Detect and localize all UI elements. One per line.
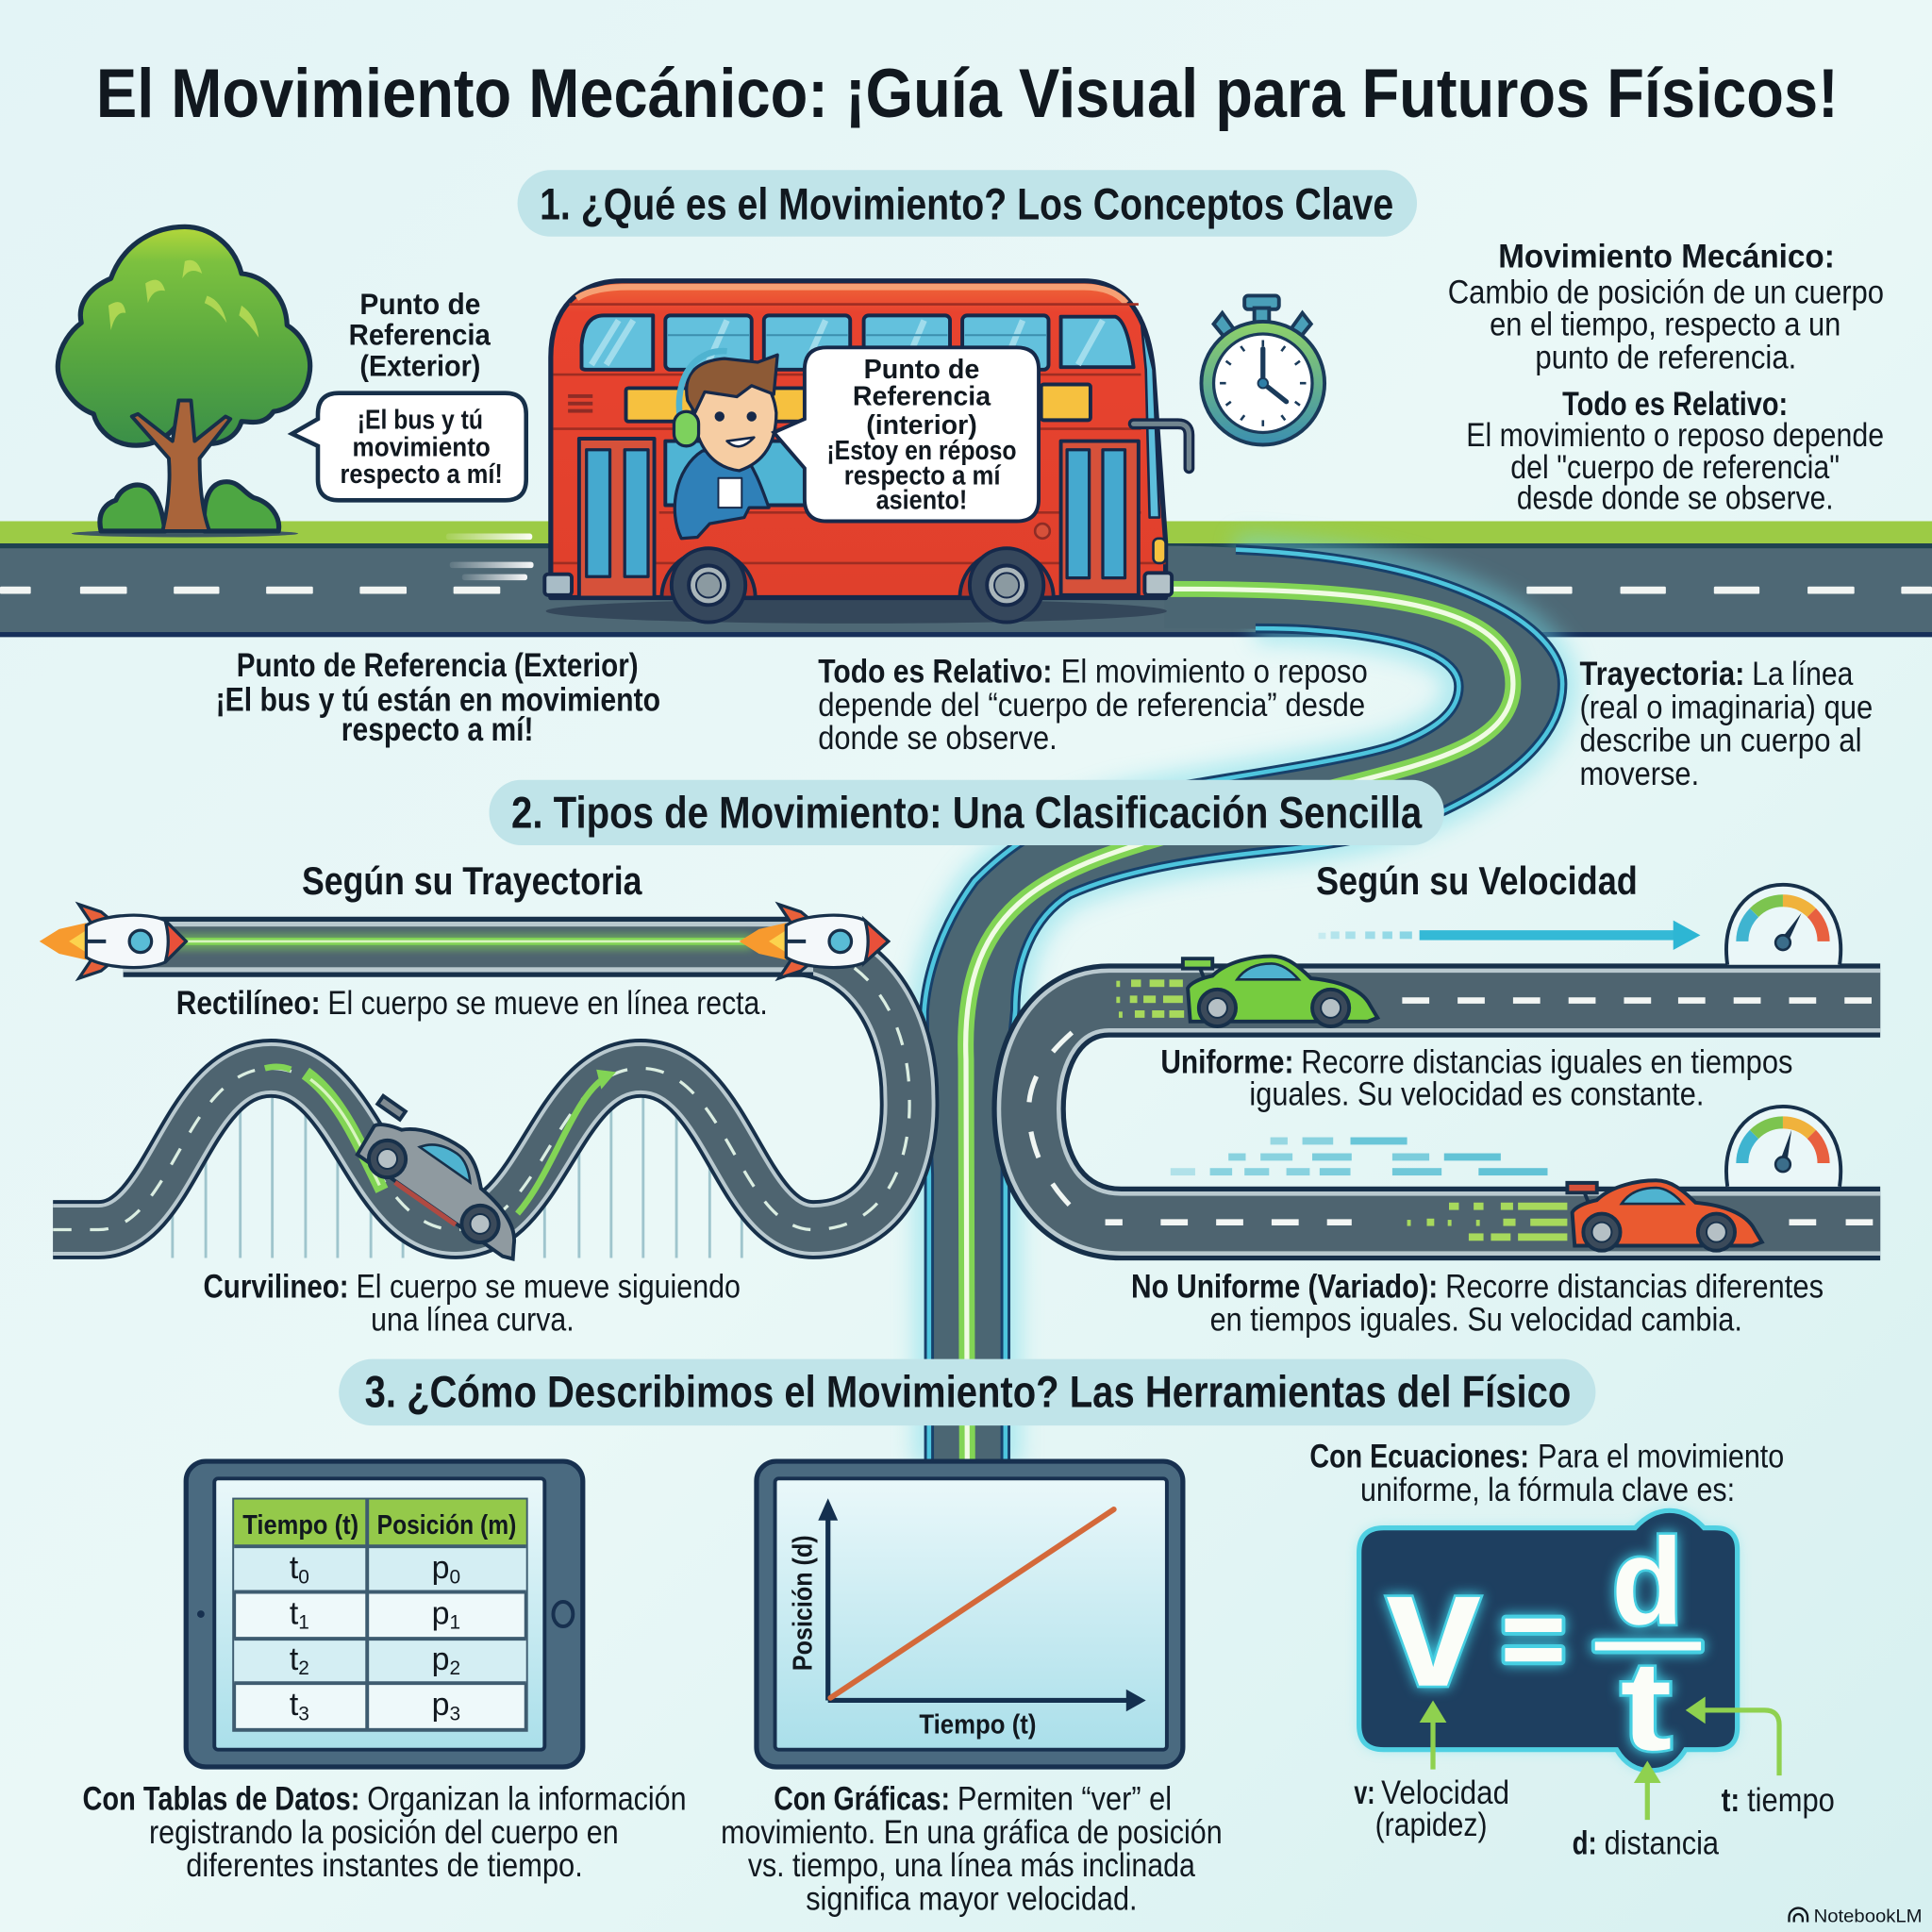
icon: green car (1116, 957, 1377, 1026)
text block: rectilinear: El cuerpo se mueve en línea recta. (327, 985, 768, 1022)
doors (579, 439, 1139, 597)
data table: t (290, 1641, 298, 1677)
text block: everything is relative: El movimiento o reposo (1061, 654, 1368, 691)
text block: equations: uniforme, la fórmula clave es: (1360, 1472, 1735, 1508)
icon: bushes (100, 482, 279, 531)
text block: curvilinear: una línea curva. (371, 1302, 575, 1339)
callout: interior speech bubble (774, 347, 1039, 521)
section 2 heading: 2. Tipos de Movimiento: Una Clasificación Sencilla (511, 788, 1423, 838)
text block: rectilinear (176, 985, 768, 1022)
section 1 heading: 1. ¿Qué es el Movimiento? Los Conceptos Clave (540, 178, 1393, 228)
text block: data tables: Organizan la información (367, 1781, 687, 1818)
speed streaks: variable motion (1171, 1138, 1567, 1241)
formula glyphs: d (1611, 1512, 1683, 1650)
text block: trajectory: describe un cuerpo al (1579, 723, 1862, 759)
icon: stopwatch (1201, 295, 1324, 445)
data table: t (290, 1550, 298, 1586)
text block: curvilinear: El cuerpo se mueve siguiendo (356, 1268, 741, 1305)
text block: equations (1309, 1439, 1784, 1508)
bus (544, 281, 1189, 624)
panel: tablet with position-time graph (757, 1461, 1183, 1767)
panel: tablet with position-time graph: Posición (d) (789, 1535, 819, 1671)
text block: mechanical movement definition: Movimiento Mecánico: (1498, 238, 1835, 275)
data table: Tiempo (t) (242, 1510, 358, 1541)
mirror (1134, 424, 1189, 468)
arrows: formula callouts (1420, 1697, 1779, 1820)
text block: exterior reference point: ¡El bus y tú están en movimiento (216, 682, 660, 719)
text block: graphs: Permiten “ver” el (958, 1781, 1172, 1818)
text block: everything is relative: Todo es Relativo: (818, 654, 1052, 691)
text block: trajectory (1579, 656, 1873, 792)
text block: everything is relative: donde se observe. (818, 720, 1058, 757)
text block: mechanical movement definition: Cambio de posición de un cuerpo (1448, 274, 1884, 310)
section 1 heading (518, 170, 1417, 237)
data table: p (432, 1641, 449, 1677)
callout: interior speech bubble: ¡Estoy en réposo (826, 436, 1017, 466)
icon: gray car on curve (344, 1094, 548, 1266)
callout: exterior speech bubble (292, 393, 526, 500)
callout: interior speech bubble: asiento! (876, 485, 967, 515)
text block: mechanical movement definition (1448, 238, 1884, 516)
text block: non uniform (1131, 1268, 1824, 1339)
text block: trajectory: moverse. (1579, 756, 1699, 792)
text block: everything is relative (818, 654, 1368, 757)
subheading: by speed: Según su Velocidad (1316, 858, 1638, 903)
icon: red car (1567, 1180, 1762, 1251)
text block: mechanical movement definition: Todo es Relativo: (1562, 386, 1788, 423)
callout: interior speech bubble: Punto de (864, 355, 979, 385)
data table: p (432, 1595, 449, 1631)
text block: data tables: registrando la posición del cuerpo en (149, 1814, 619, 1851)
bumpers and lights (544, 575, 572, 595)
text block: trajectory: La línea (1752, 656, 1854, 692)
panel: tablet with position-time graph: Tiempo (t) (919, 1710, 1036, 1740)
data table: 3 (298, 1703, 309, 1724)
data table: t (290, 1595, 298, 1631)
text block: uniform: iguales. Su velocidad es constante. (1249, 1076, 1704, 1113)
text block: graphs: vs. tiempo, una línea más inclinada (748, 1847, 1195, 1884)
text block: trajectory: Trayectoria: (1579, 656, 1744, 692)
icon: tree (58, 226, 310, 537)
icon: left rocket (40, 905, 186, 978)
formula labels: Velocidad (1381, 1774, 1509, 1811)
text block: exterior reference point (216, 647, 660, 748)
text block: non uniform: en tiempos iguales. Su velocidad cambia. (1210, 1302, 1742, 1339)
chart: support pillars under curved road (173, 1068, 741, 1258)
data table: 0 (298, 1566, 309, 1588)
watermark: NotebookLM (1814, 1907, 1923, 1927)
text block: curvilinear (204, 1268, 741, 1339)
formula labels: tiempo (1747, 1782, 1835, 1819)
text block: exterior reference point: Punto de Referencia (Exterior) (237, 647, 639, 684)
text block: non uniform: No Uniforme (Variado): (1131, 1268, 1438, 1305)
text block: uniform (1160, 1044, 1792, 1113)
text block: uniform: Uniforme: (1160, 1044, 1293, 1081)
text block: curvilinear: Curvilineo: (204, 1268, 349, 1305)
formula labels: d: (1573, 1825, 1597, 1862)
text block: graphs: significa mayor velocidad. (806, 1880, 1138, 1917)
data table: t (290, 1687, 298, 1723)
data table: 2 (449, 1657, 460, 1679)
formula glyphs: t (1621, 1635, 1672, 1777)
panel: tablet with data table (186, 1461, 583, 1767)
text block: mechanical movement definition: en el tiempo, respecto a un (1490, 306, 1840, 342)
text block: graphs: Con Gráficas: (774, 1781, 950, 1818)
section 3 heading (339, 1359, 1595, 1425)
callout: interior speech bubble: respecto a mí (844, 460, 1001, 491)
green motion arrows on the road (265, 1067, 291, 1070)
text block: rectilinear: Rectilíneo: (176, 985, 321, 1022)
section 3 heading: 3. ¿Cómo Describimos el Movimiento? Las Herramientas del Físico (365, 1367, 1571, 1417)
exterior reference label: (Exterior) (359, 349, 480, 382)
text block: mechanical movement definition: del "cuerpo de referencia" (1510, 449, 1840, 486)
formula labels: distancia (1605, 1825, 1719, 1862)
formula glyphs (1386, 1512, 1703, 1777)
formula labels (1354, 1774, 1835, 1862)
text block: data tables: diferentes instantes de tiempo. (186, 1847, 583, 1884)
arrow: constant speed (1319, 921, 1700, 950)
graph line (830, 1509, 1114, 1698)
trajectory road: the path of motion from bus to section 3 (924, 546, 1562, 1466)
rectilinear road with rockets (40, 905, 889, 978)
text block: equations: Para el movimiento (1538, 1439, 1784, 1475)
callout: exterior speech bubble: movimiento (353, 432, 491, 462)
callout: exterior speech bubble: ¡El bus y tú (358, 406, 483, 436)
data table: 3 (449, 1703, 460, 1724)
yellow panels (626, 385, 1091, 422)
text block: uniform: Recorre distancias iguales en tiempos (1301, 1044, 1792, 1081)
text block: data tables (83, 1781, 687, 1884)
icon: speedometer variable (1726, 1107, 1840, 1187)
upper windows (581, 315, 1134, 370)
text block: equations: Con Ecuaciones: (1309, 1439, 1529, 1475)
passenger (674, 351, 777, 539)
exterior reference label (349, 288, 491, 382)
data table: 0 (449, 1566, 460, 1588)
formula labels: (rapidez) (1375, 1807, 1487, 1843)
formula labels: t: (1722, 1782, 1740, 1819)
data table (234, 1500, 526, 1730)
text block: mechanical movement definition: punto de referencia. (1535, 340, 1796, 376)
data table: p (432, 1550, 449, 1586)
panel: road scene with grass strip (0, 521, 1932, 637)
data table: Posición (m) (377, 1510, 516, 1541)
wheels (661, 548, 1054, 623)
graph axes (828, 1516, 1131, 1700)
text block: non uniform: Recorre distancias diferentes (1445, 1268, 1824, 1305)
text block: exterior reference point: respecto a mí! (341, 711, 534, 748)
text block: data tables: Con Tablas de Datos: (83, 1781, 359, 1818)
text block: mechanical movement definition: desde donde se observe. (1517, 479, 1834, 516)
data table: p (432, 1687, 449, 1723)
icon: speedometer uniform (1726, 885, 1840, 965)
text block: everything is relative: depende del “cuerpo de referencia” desde (818, 687, 1365, 724)
formula glyphs: v (1386, 1534, 1481, 1722)
callout: interior speech bubble: Referencia (853, 382, 991, 412)
data table: 2 (298, 1657, 309, 1679)
text block: graphs (721, 1781, 1223, 1917)
callout: interior speech bubble: (interior) (866, 410, 977, 441)
formula labels: v: (1354, 1774, 1375, 1811)
exterior reference label: Referencia (349, 319, 491, 352)
text block: graphs: movimiento. En una gráfica de posición (721, 1814, 1223, 1851)
section 2 heading (490, 780, 1444, 845)
callout: exterior speech bubble: respecto a mí! (340, 459, 503, 490)
text block: trajectory: (real o imaginaria) que (1579, 689, 1873, 725)
speed road (1029, 1001, 1880, 1224)
data table: 1 (298, 1612, 309, 1634)
panel: formula box (1359, 1510, 1738, 1777)
icon: right rocket (740, 905, 889, 978)
curved road (53, 946, 909, 1230)
exterior reference label: Punto de (359, 288, 480, 321)
subheading: by trajectory: Según su Trayectoria (302, 858, 642, 903)
data table: 1 (449, 1612, 460, 1634)
